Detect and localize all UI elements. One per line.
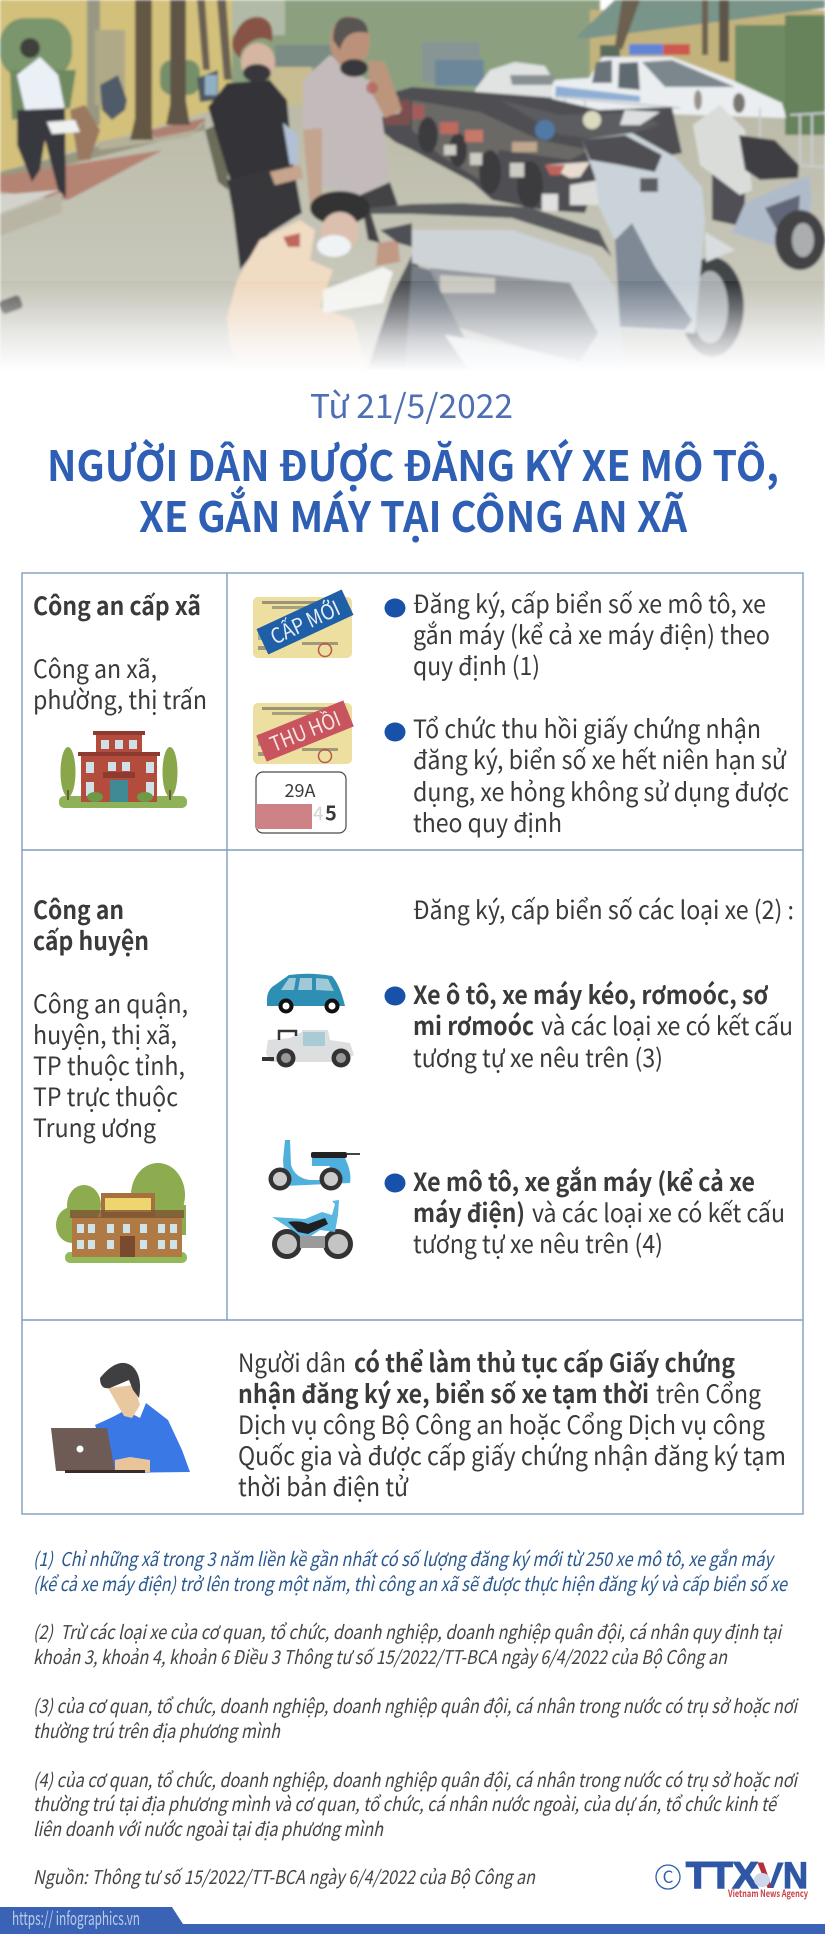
row 1 left: commune police: Công an cấp xã (33, 587, 201, 623)
parked motorbikes (380, 87, 682, 213)
row 2 left: district police: TP trực thuộc (33, 1078, 178, 1114)
logo: TTXVN: V (757, 1855, 784, 1896)
row 1 left: commune police: Công an xã, (33, 650, 157, 686)
title: XE GẮN MÁY TẠI CÔNG AN XÃ (139, 484, 688, 545)
note 1 (33, 1545, 788, 1597)
logo: TTXVN: C (663, 1863, 674, 1888)
vehicle bullets and text: tương tự xe nêu trên (4) (413, 1225, 663, 1261)
officer in beige (227, 220, 367, 367)
icon: commune police building (59, 731, 187, 808)
photo: police officer registering a motorbike (0, 0, 825, 383)
yellow building left (0, 0, 232, 172)
row 2 left: district police: TP thuộc tỉnh, (33, 1047, 185, 1083)
row 1 right: duties (384, 585, 789, 840)
row 2 left: district police: huyện, thị xã, (33, 1016, 177, 1052)
note 2 (33, 1618, 783, 1670)
note 2: khoản 3, khoản 4, khoản 6 Điều 3 Thông tư số 15/2022/TT-BCA ngày 6/4/2022 của Bộ Công an (33, 1643, 728, 1670)
icon: blue motorbike (272, 1200, 353, 1259)
row 3 text: temporary registration: có thể làm thủ tục cấp Giấy chứng (354, 1344, 735, 1380)
ground (0, 100, 825, 380)
row 1 right: duties: Đăng ký, cấp biển số xe mô tô, xe (413, 585, 766, 621)
icon: white jeep (262, 1030, 354, 1068)
woman in black (205, 120, 228, 190)
second scooter right (712, 173, 745, 227)
row 2 left: district police: Công an (33, 891, 124, 927)
row 2 left: district police: Công an quận, (33, 985, 188, 1021)
logo: TTXVN: N (783, 1855, 808, 1896)
icon: person at laptop (51, 1363, 190, 1473)
man in white shirt (20, 38, 40, 58)
source: Nguồn: Thông tư số 15/2022/TT-BCA ngày 6/4/2022 của Bộ Công an (33, 1863, 536, 1890)
row 1 right: duties: quy định (1) (413, 647, 540, 683)
icon: blue scooter (268, 1140, 360, 1190)
icon: new registration card: CẤP MỚI (265, 593, 345, 651)
subtitle: date: Từ 21/5/2022 (310, 380, 513, 428)
row 2 left: district police: cấp huyện (33, 922, 149, 958)
icon: blue car (267, 974, 346, 1014)
row 1 left: commune police: phường, thị trấn (33, 681, 207, 717)
row 1 right: duties: đăng ký, biển số xe hết niên hạn sử (413, 741, 787, 777)
note 4: liên doanh với nước ngoài tại địa phương mình (33, 1815, 384, 1842)
vehicle bullets and text (384, 976, 793, 1261)
row 2 right: vehicles intro: Đăng ký, cấp biển số các loại xe (2) : (413, 891, 794, 927)
vehicle bullets and text: Xe mô tô, xe gắn máy (kể cả xe (413, 1163, 755, 1199)
row 1 right: duties: Tổ chức thu hồi giấy chứng nhận (413, 710, 761, 746)
icon: licence plate (256, 772, 346, 833)
row 3 text: temporary registration: trên Cổng (656, 1375, 761, 1411)
white car (475, 62, 556, 97)
truck (422, 42, 480, 82)
icon: licence plate: 5 (325, 797, 337, 826)
icon: licence plate: 4 (313, 799, 324, 826)
front wheel (680, 257, 744, 357)
note 3: thường trú trên địa phương mình (33, 1717, 281, 1744)
front shield (582, 133, 705, 333)
row 3 text: temporary registration: Người dân (238, 1344, 346, 1380)
icon: revoked card: THU HỒI (265, 703, 345, 759)
row 1 left: commune police (33, 587, 207, 717)
logo: TTXVN: TTX (686, 1855, 758, 1896)
icon: district police building (56, 1163, 187, 1263)
vehicle bullets and text: Xe ô tô, xe máy kéo, rơmoóc, sơ (413, 976, 768, 1012)
seated person and dog (100, 75, 127, 120)
row 2 left: district police (33, 891, 188, 1145)
vehicle bullets and text: và các loại xe có kết cấu (532, 1194, 785, 1230)
row 1 right: duties: dụng, xe hỏng không sử dụng được (413, 773, 789, 809)
row 1 right: duties: gắn máy (kể cả xe máy điện) theo (413, 616, 770, 652)
vehicle bullets and text: và các loại xe có kết cấu (541, 1007, 793, 1043)
man in grey shirt (303, 128, 322, 208)
row 2 left: district police: Trung ương (33, 1109, 156, 1145)
vehicle bullets and text: máy điện) (413, 1194, 525, 1230)
table frame (22, 573, 803, 1514)
note 4 (33, 1766, 799, 1842)
title (47, 433, 779, 545)
row 3 text: temporary registration: Dịch vụ công Bộ Công an hoặc Cổng Dịch vụ công (238, 1406, 765, 1442)
row 3 text: temporary registration: Quốc gia và được cấp giấy chứng nhận đăng ký tạm (238, 1437, 786, 1473)
icon: licence plate: 29A (285, 777, 316, 803)
title: NGƯỜI DÂN ĐƯỢC ĐĂNG KÝ XE MÔ TÔ, (47, 433, 779, 494)
row 1 right: duties: theo quy định (413, 804, 562, 840)
note 3 (33, 1692, 799, 1744)
row 3 text: temporary registration: nhận đăng ký xe, biển số xe tạm thời (238, 1375, 649, 1411)
vehicle bullets and text: tương tự xe nêu trên (3) (413, 1039, 663, 1075)
row 3 text: temporary registration (238, 1344, 786, 1504)
background right (590, 10, 825, 105)
row 3 text: temporary registration: thời bản điện tử (238, 1468, 409, 1504)
main scooter rear (367, 255, 480, 370)
footer band: https:// infographics.vn (12, 1905, 140, 1931)
logo: TTXVN (656, 1855, 808, 1900)
police car (552, 57, 786, 118)
footer band (0, 1905, 825, 1934)
vehicle bullets and text: mi rơmoóc (413, 1007, 534, 1043)
fence (555, 97, 825, 167)
